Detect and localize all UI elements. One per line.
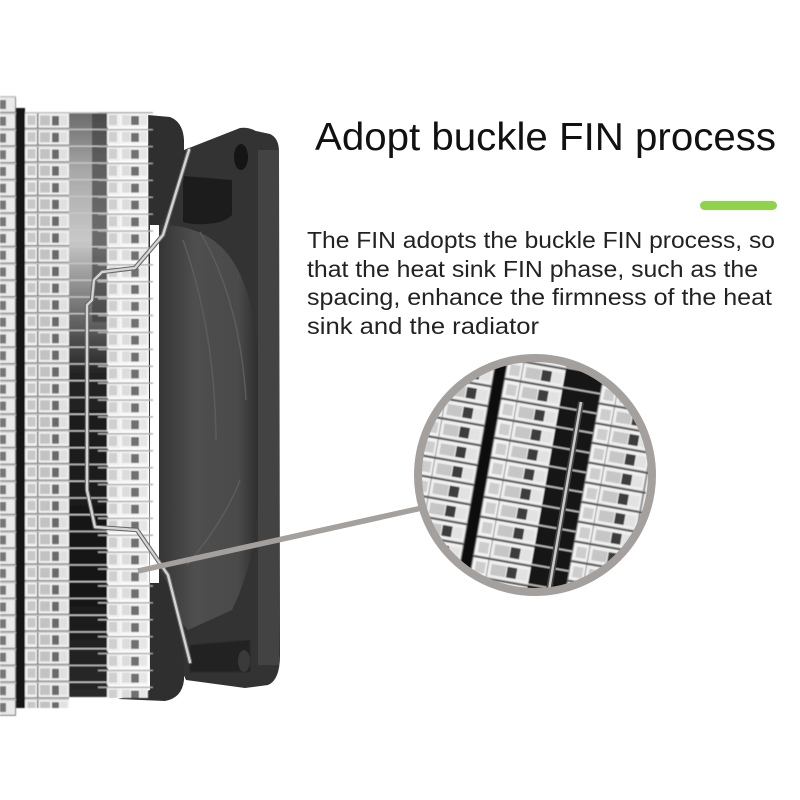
- fin lines: [68, 112, 108, 697]
- heatsink fins: [0, 96, 153, 716]
- fan screw hole bottom: [238, 650, 250, 672]
- magnified dark channel right: [527, 366, 602, 588]
- column C: [98, 112, 153, 698]
- magnified fins left: [422, 370, 496, 561]
- gap column dark side: [92, 112, 107, 322]
- description text: that the heat sink FIN phase, such as the: [307, 256, 758, 282]
- magnified fins right: [566, 384, 648, 584]
- white strip beside fins: [150, 225, 159, 583]
- green accent bar: [700, 201, 777, 210]
- description text: spacing, enhance the firmness of the heat: [307, 284, 773, 310]
- column B: [25, 112, 69, 708]
- title: Adopt buckle FIN process: [315, 116, 776, 159]
- description text: sink and the radiator: [307, 313, 539, 339]
- column A: [0, 96, 16, 716]
- retention wire: [87, 150, 190, 662]
- dark channel behind column A and B: [15, 108, 25, 708]
- magnified dark channel left: [460, 366, 508, 568]
- fan frame: [158, 128, 280, 688]
- callout leader line: [138, 508, 422, 571]
- fan blades: [160, 225, 258, 672]
- magnified fins centre: [470, 362, 567, 588]
- gap column: [68, 112, 108, 697]
- fan screw hole top: [234, 144, 248, 170]
- callout magnifier: [414, 354, 656, 596]
- fan inner opening: [183, 176, 232, 224]
- description text: [307, 227, 775, 339]
- fan right frame strip: [258, 150, 279, 665]
- clip bracket: [118, 115, 184, 701]
- description text: The FIN adopts the buckle FIN process, so: [307, 227, 775, 253]
- magnified wire: [549, 402, 581, 590]
